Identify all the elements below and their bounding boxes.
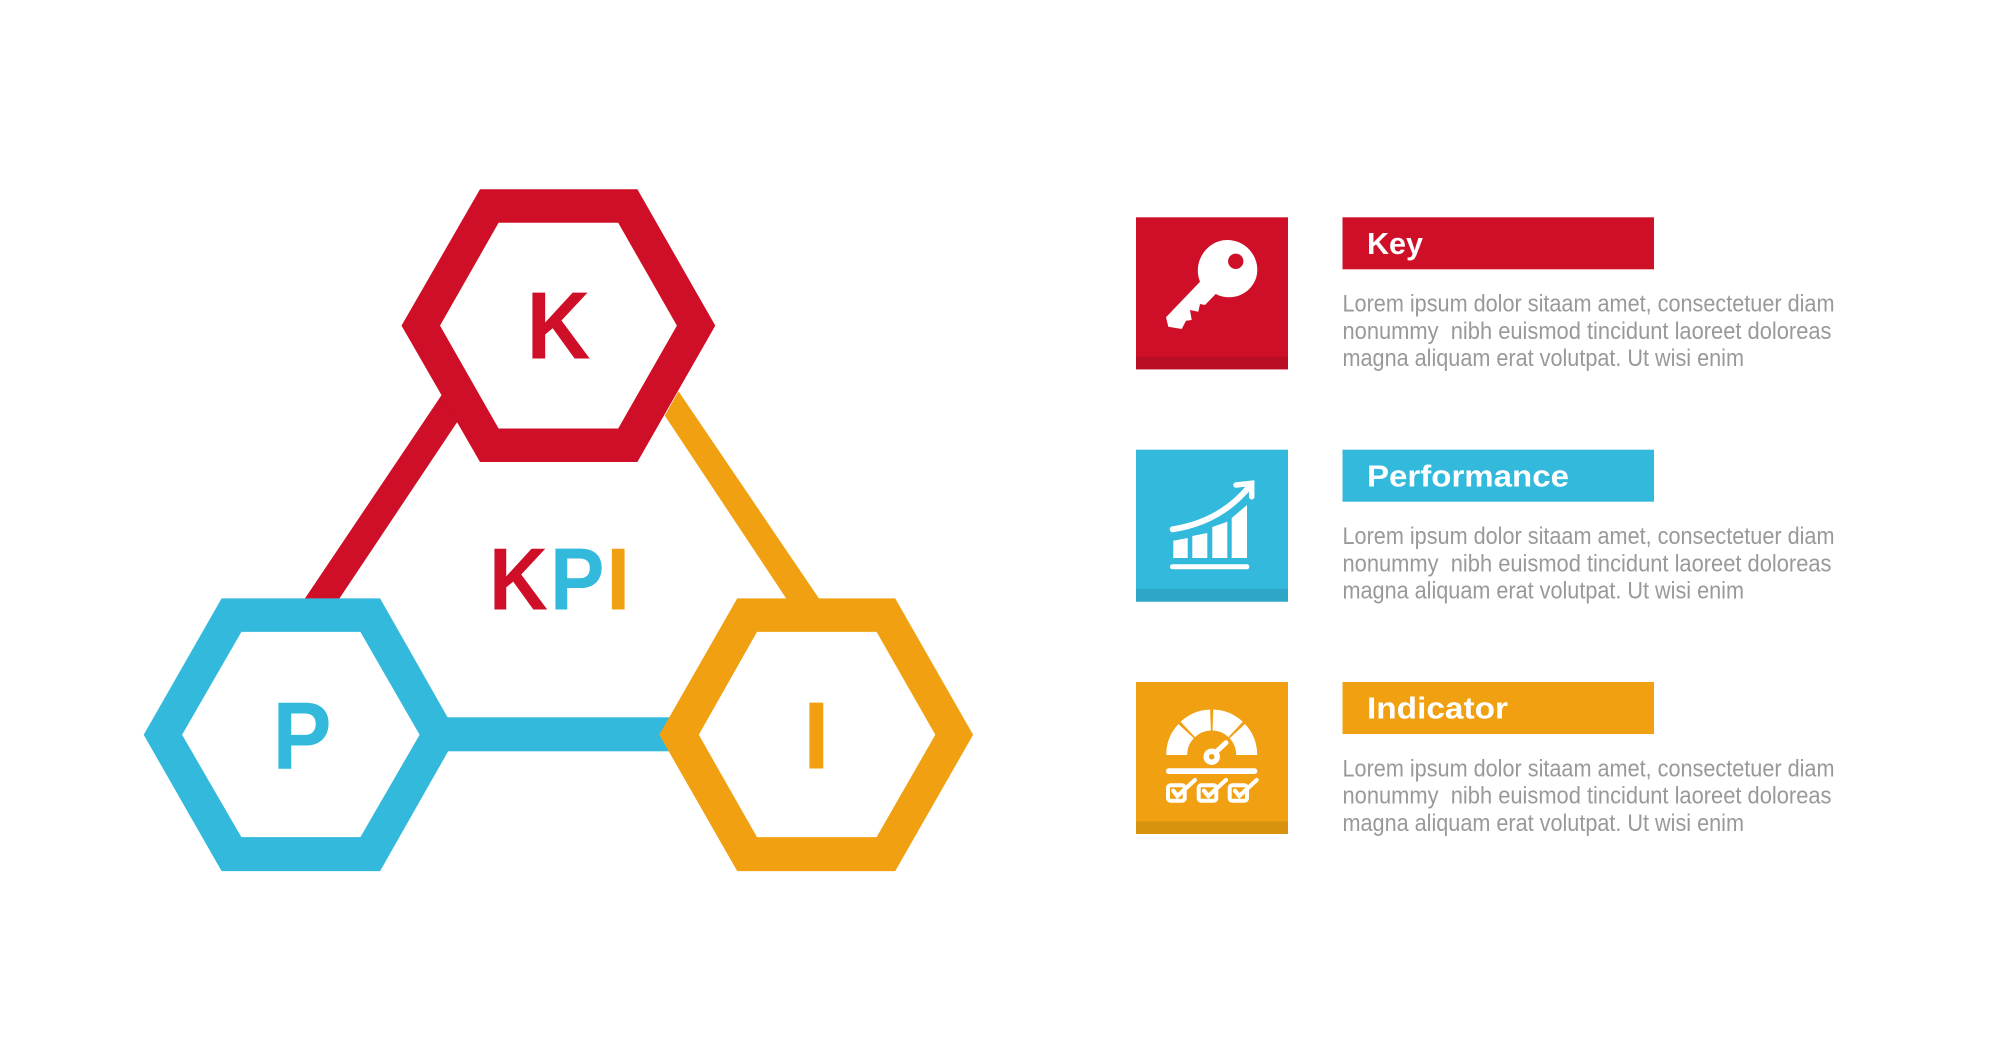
center title: KPI: I: [606, 529, 630, 628]
row: Key: [1136, 217, 1834, 372]
center title: KPI: [489, 529, 630, 628]
label bar: Performance: [1342, 450, 1654, 502]
letter P: P: [272, 681, 332, 789]
label bar: Performance: Performance: [1367, 459, 1569, 493]
icon box: key: [1136, 217, 1288, 369]
label bar: Indicator: [1342, 682, 1654, 734]
letter I: I: [803, 683, 830, 790]
label bar: Key: Key: [1367, 227, 1423, 261]
row: Performance: [1136, 450, 1834, 605]
description: Performance: magna aliquam erat volutpat. Ut wisi enim: [1342, 578, 1744, 605]
hexagon: K: [402, 189, 715, 462]
description: Key: magna aliquam erat volutpat. Ut wisi enim: [1342, 345, 1744, 372]
description: Performance: [1342, 523, 1834, 605]
description: Indicator: Lorem ipsum dolor sitaam amet, consectetuer diam: [1342, 755, 1834, 782]
icon box: growth chart: [1136, 450, 1288, 602]
center title: KPI: K: [489, 530, 548, 628]
label bar: Key: [1342, 217, 1654, 269]
hexagon: I: [659, 598, 973, 871]
connector: red K to P: [304, 385, 470, 600]
description: Indicator: [1342, 755, 1834, 837]
connector: blue P to I: [440, 717, 680, 751]
letter K: K: [526, 271, 590, 379]
description: Key: Lorem ipsum dolor sitaam amet, consectetuer diam: [1342, 291, 1834, 318]
icon box: gauge with checklist: [1136, 682, 1288, 834]
connector: orange K to I: [665, 391, 820, 600]
description: Performance: Lorem ipsum dolor sitaam amet, consectetuer diam: [1342, 523, 1834, 550]
description: Key: nonummy nibh euismod tincidunt laoreet doloreas: [1342, 318, 1832, 345]
panel: hexagon triangle diagram: [144, 189, 973, 871]
center title: KPI: P: [550, 530, 604, 628]
label bar: Indicator: Indicator: [1367, 692, 1508, 726]
row: Indicator: [1136, 682, 1834, 837]
description: Indicator: magna aliquam erat volutpat. Ut wisi enim: [1342, 810, 1744, 837]
description: Indicator: nonummy nibh euismod tincidunt laoreet doloreas: [1342, 783, 1832, 810]
description: Performance: nonummy nibh euismod tincidunt laoreet doloreas: [1342, 550, 1832, 577]
hexagon: P: [144, 598, 457, 871]
description: Key: [1342, 291, 1834, 372]
